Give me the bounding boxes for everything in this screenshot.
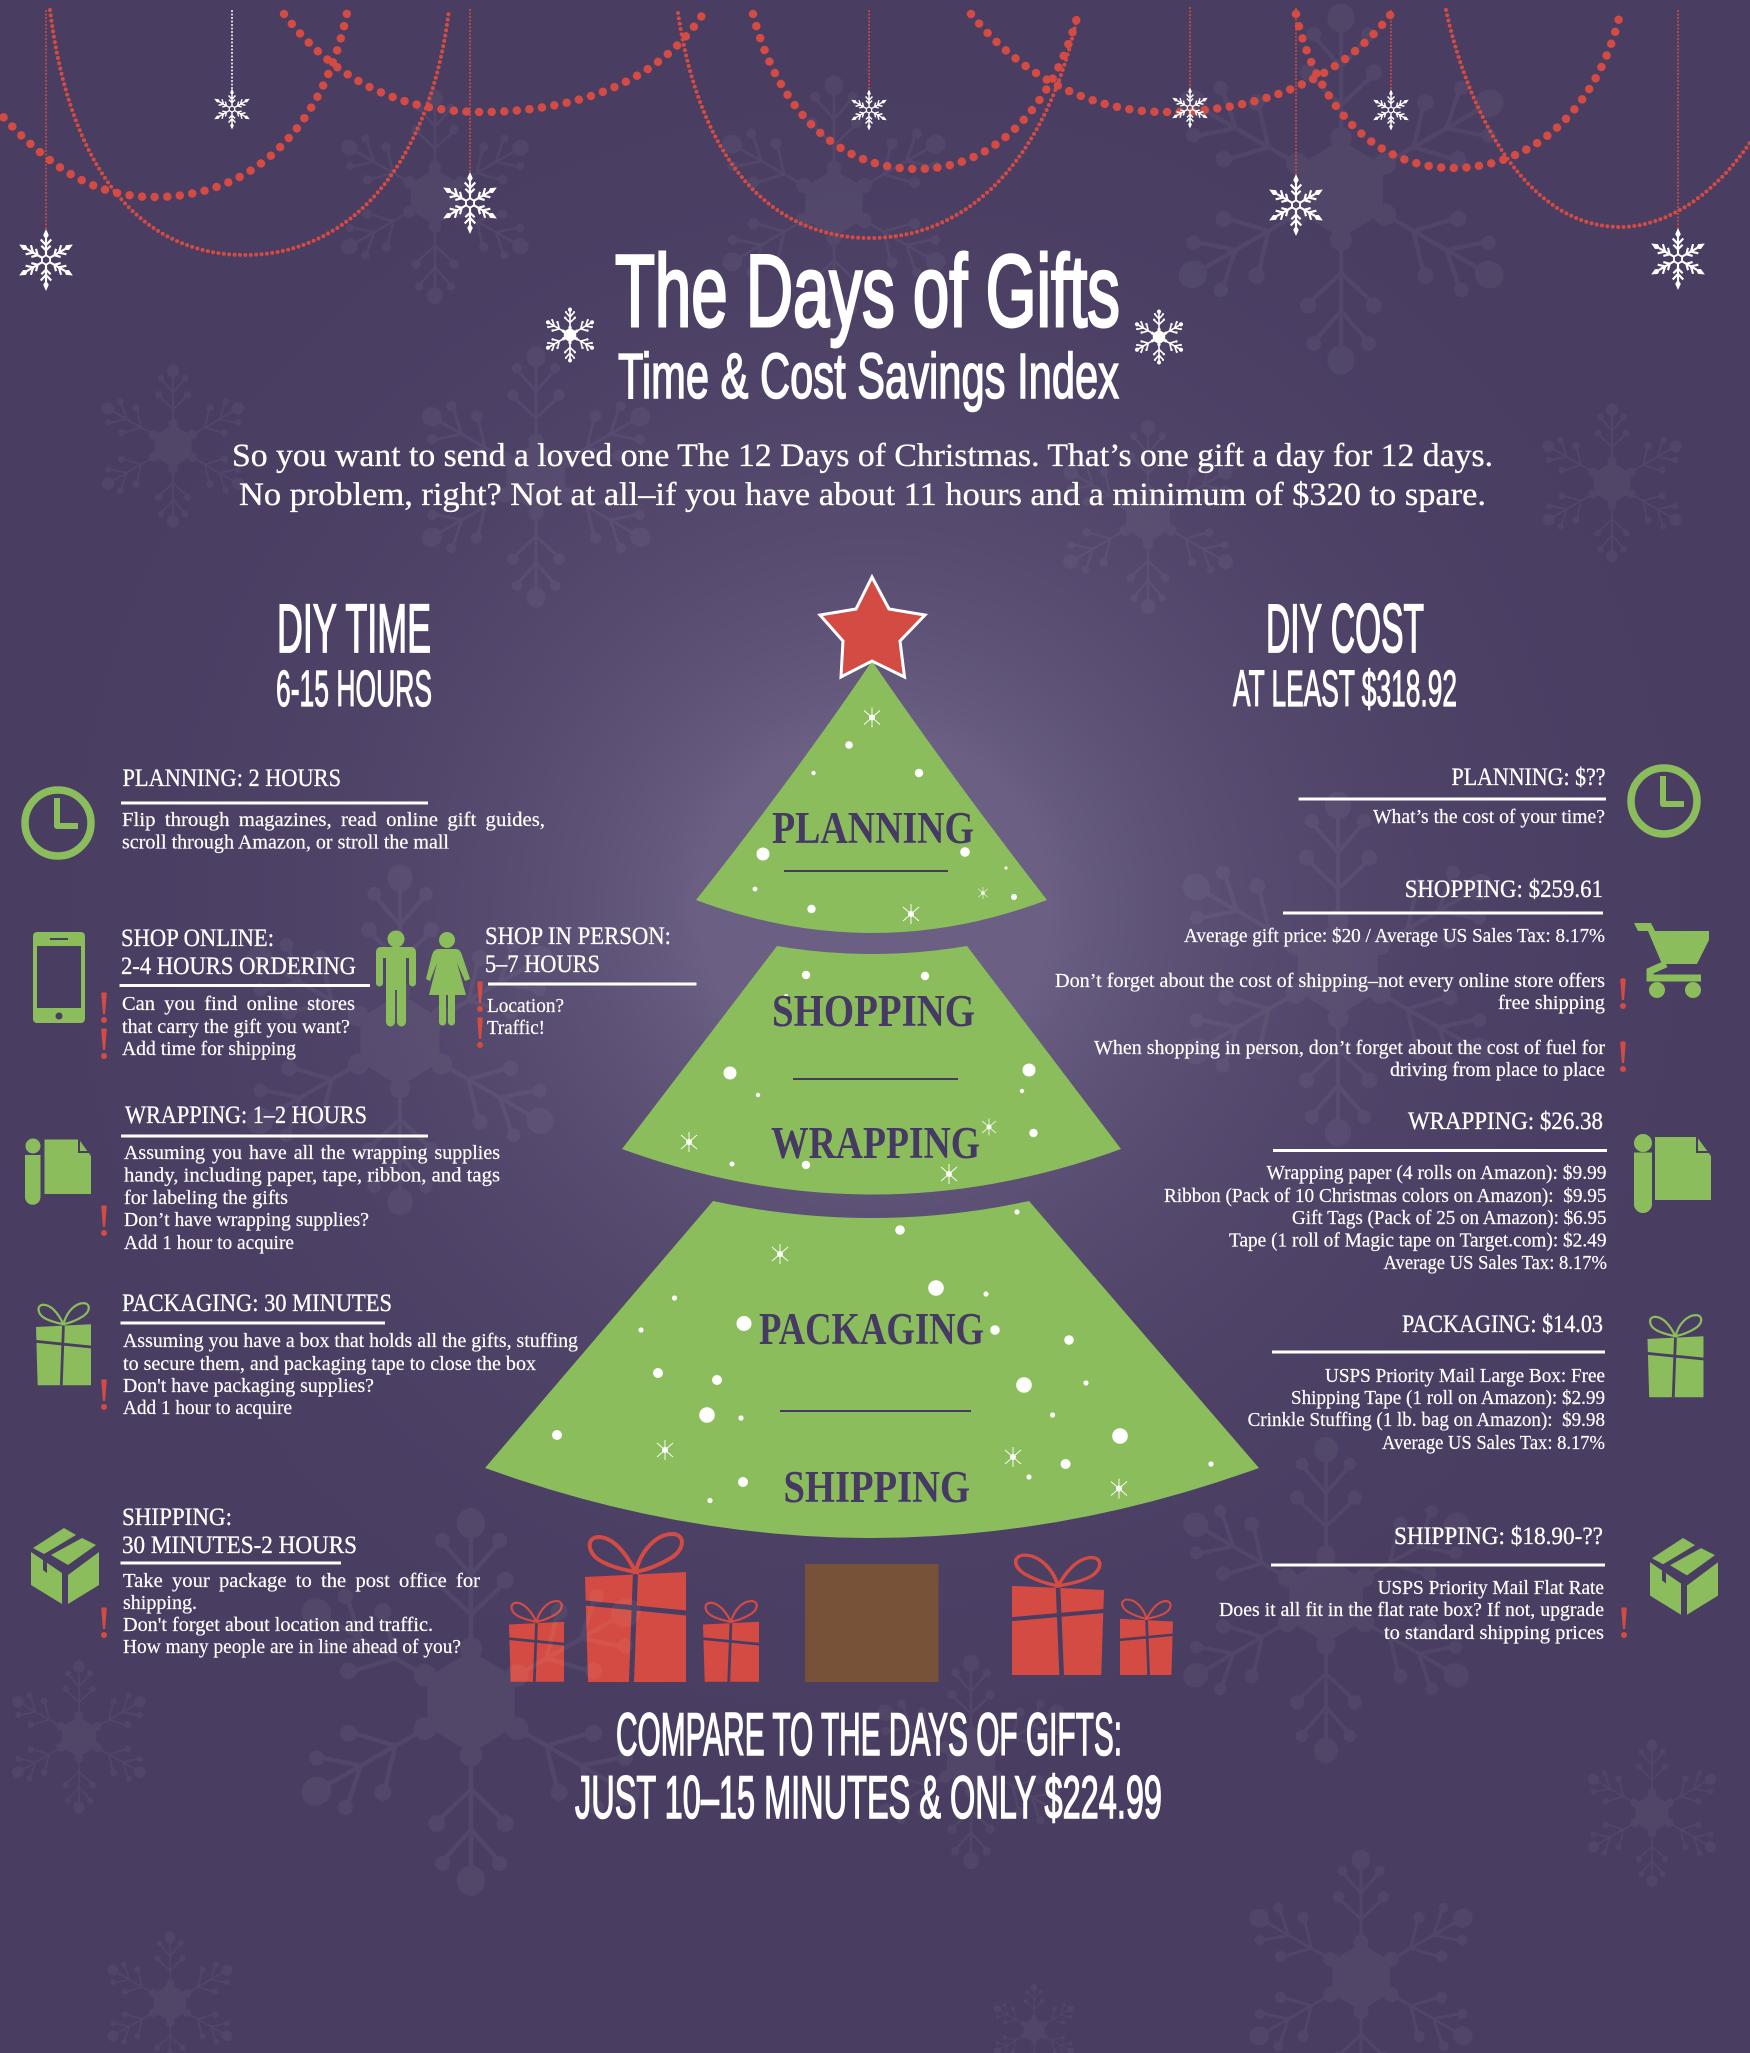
panel: cost shopping: free shipping [1498,992,1605,1014]
panel: time shipping: Take your package to the post office for [123,1570,480,1592]
tree [485,577,1259,1538]
panel: time shipping: 30 MINUTES-2 HOURS [122,1532,357,1559]
panel: time packaging: PACKAGING: 30 MINUTES [122,1290,392,1317]
panel: time packaging: to secure them, and packaging tape to close the box [123,1353,536,1375]
panel: time wrapping: WRAPPING: 1–2 HOURS [125,1102,367,1129]
panel: cost packaging: Shipping Tape (1 roll on Amazon): $2.99 [1291,1387,1605,1409]
panel: cost packaging: USPS Priority Mail Large Box: Free [1325,1365,1605,1387]
panel: time planning: Flip through magazines, read online gift guides, [122,809,545,831]
panel: cost planning [1299,764,1697,834]
panel: cost packaging: Crinkle Stuffing (1 lb. bag on Amazon): $9.98 [1248,1409,1605,1431]
icon: clock [1631,768,1697,834]
panel: cost shopping: SHOPPING: $259.61 [1405,876,1603,903]
panel: time planning: PLANNING: 2 HOURS [122,765,341,792]
panel: time shop online: that carry the gift you want? [122,1016,350,1038]
icon: cart [1634,923,1709,998]
panel: cost shipping: to standard shipping prices [1384,1622,1604,1644]
panel: cost wrapping [1164,1108,1711,1274]
panel: cost packaging: PACKAGING: $14.03 [1402,1311,1603,1338]
panel: time wrapping: handy, including paper, tape, ribbon, and tags [124,1164,500,1186]
panel: cost shopping: Average gift price: $20 / Average US Sales Tax: 8.17% [1184,925,1605,947]
panel: cost wrapping: Ribbon (Pack of 10 Christmas colors on Amazon): $9.95 [1164,1185,1606,1207]
panel: time wrapping: for labeling the gifts [124,1187,288,1209]
panel: cost shipping [1219,1523,1718,1644]
panel: time packaging: Assuming you have a box that holds all the gifts, stuffing [123,1330,578,1352]
panel: time shop online: SHOP ONLINE: [121,925,274,952]
panel: time shop online: Add time for shipping [122,1038,296,1060]
panel: time packaging [36,1290,578,1419]
heading: DIY cost [1233,590,1457,717]
hanging snowflakes [17,7,1707,291]
icon: box [31,1528,99,1604]
intro text: No problem, right? Not at all–if you have about 11 hours and a minimum of $320 to spare. [239,477,1486,513]
panel: cost shopping: driving from place to place [1390,1059,1605,1081]
tree tier: shopping and wrapping: SHOPPING [772,986,975,1036]
icon: star [820,577,925,677]
footer comparison: JUST 10–15 MINUTES & ONLY $224.99 [575,1764,1162,1831]
panel: cost planning: PLANNING: $?? [1452,764,1606,791]
panel: time planning [25,765,545,856]
tree tier: shopping and wrapping: WRAPPING [771,1118,980,1168]
heading: DIY cost: DIY COST [1266,590,1424,667]
panel: time wrapping [25,1102,500,1254]
panel: time shipping: shipping. [123,1592,197,1614]
panel: cost shipping: Does it all fit in the flat rate box? If not, upgrade [1219,1599,1604,1621]
icon: people [376,930,470,1026]
tree tier: packaging and shipping: PACKAGING [759,1304,984,1354]
icon: box [1650,1538,1718,1615]
panel: time shop in person: Location? [487,995,564,1017]
panel: cost shopping [1055,876,1709,1081]
heading: DIY time [276,590,432,717]
panel: time packaging: Don't have packaging supplies? [123,1375,374,1397]
tree tier: shopping and wrapping [622,946,1121,1194]
icon: gift [1648,1315,1704,1397]
panel: time shipping [31,1504,480,1658]
panel: time shop in person: SHOP IN PERSON: [485,923,671,950]
panel: time shipping: SHIPPING: [122,1504,232,1531]
icon: wrapping paper [25,1138,91,1205]
title: Time & Cost Savings Index [618,340,1119,412]
panel: cost shipping: USPS Priority Mail Flat Rate [1378,1577,1604,1599]
panel: time wrapping: Don’t have wrapping supplies? [124,1209,369,1231]
panel: cost shopping: Don’t forget about the cost of shipping–not every online store offers [1055,970,1605,992]
overlay snowflake across gifts [282,1508,660,1896]
heading: DIY time: DIY TIME [277,590,431,667]
icon: title snowflake left [543,307,597,363]
icon: gift [36,1303,91,1385]
heading: DIY cost: AT LEAST $318.92 [1233,660,1457,717]
tree tier: packaging and shipping [485,1201,1259,1538]
heading: DIY time: 6-15 HOURS [276,660,432,717]
panel: time shop online [33,925,370,1060]
panel: cost packaging [1248,1311,1704,1454]
tree tier: packaging and shipping: SHIPPING [784,1462,970,1512]
panel: time shop in person: Traffic! [487,1017,545,1039]
panel: cost packaging: Average US Sales Tax: 8.17% [1382,1432,1605,1454]
panel: time shipping: Don't forget about location and traffic. [123,1614,433,1636]
panel: cost planning: What’s the cost of your time? [1373,806,1605,828]
tree tier: planning [696,661,1047,933]
panel: cost shipping: SHIPPING: $18.90-?? [1394,1523,1603,1550]
panel: time packaging: Add 1 hour to acquire [123,1397,292,1419]
panel: time shop online: 2-4 HOURS ORDERING [121,953,356,980]
panel: time planning: scroll through Amazon, or stroll the mall [122,832,449,854]
garlands [0,10,1750,255]
title [615,234,1120,412]
tree tier: planning: PLANNING [772,803,974,853]
icon: phone [33,932,85,1023]
panel: time shop online: Can you find online stores [122,993,355,1015]
gifts under tree [509,1534,1173,1682]
panel: cost wrapping: Gift Tags (Pack of 25 on Amazon): $6.95 [1292,1207,1606,1229]
panel: time wrapping: Add 1 hour to acquire [124,1232,294,1254]
footer comparison [575,1701,1162,1831]
icon: wrapping paper [1634,1134,1711,1213]
panel: cost wrapping: WRAPPING: $26.38 [1408,1108,1603,1135]
panel: time shipping: How many people are in line ahead of you? [123,1636,461,1658]
panel: cost wrapping: Average US Sales Tax: 8.17% [1384,1252,1607,1274]
intro text: So you want to send a loved one The 12 Days of Christmas. That’s one gift a day for 12 days. [232,438,1493,474]
panel: time shop in person [477,923,696,1048]
intro text [232,438,1493,513]
panel: cost shopping: When shopping in person, don’t forget about the cost of fuel for [1094,1037,1605,1059]
icon: title snowflake right [1132,309,1186,365]
icon: clock [25,790,91,856]
panel: time shop in person: 5–7 HOURS [485,951,600,978]
panel: cost wrapping: Tape (1 roll of Magic tape on Target.com): $2.49 [1229,1230,1606,1252]
panel: cost wrapping: Wrapping paper (4 rolls on Amazon): $9.99 [1266,1162,1606,1184]
footer comparison: COMPARE TO THE DAYS OF GIFTS: [616,1701,1122,1768]
title: The Days of Gifts [615,234,1120,348]
panel: time wrapping: Assuming you have all the wrapping supplies [124,1142,500,1164]
